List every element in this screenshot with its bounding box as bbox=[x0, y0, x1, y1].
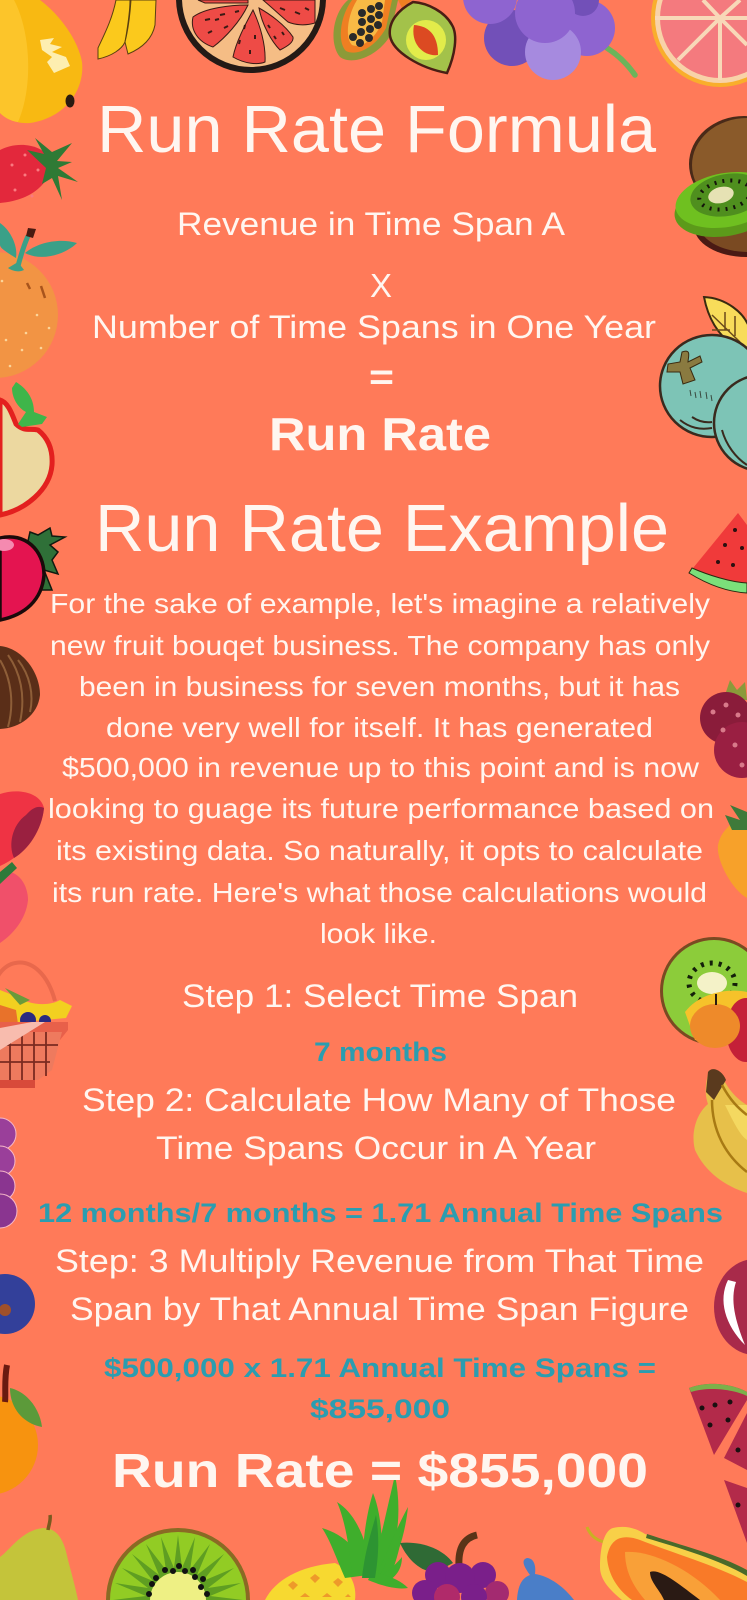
step 1 value: 7 months bbox=[314, 1037, 447, 1067]
final result: Run Rate = $855,000 bbox=[112, 1445, 648, 1498]
formula operator: equals: = bbox=[369, 356, 394, 397]
icon: blueberry bbox=[0, 1274, 35, 1334]
icon: grapefruit slice bbox=[651, 0, 747, 87]
step 3 value: $500,000 x 1.71 Annual Time Spans = bbox=[104, 1353, 656, 1383]
example paragraph: been in business for seven months, but it has bbox=[79, 671, 680, 702]
icon: pear bbox=[0, 1515, 78, 1600]
step 2 value: 12 months/7 months = 1.71 Annual Time Spans bbox=[38, 1198, 723, 1228]
example paragraph: looking to guage its future performance based on bbox=[48, 793, 714, 824]
step 2 heading: Step 2: Calculate How Many of Those bbox=[82, 1082, 676, 1118]
heading: run rate example: Run Rate Example bbox=[95, 491, 669, 566]
icon: strawberry bbox=[0, 138, 78, 203]
example paragraph: done very well for itself. It has generated bbox=[106, 712, 653, 743]
icon: purple grape bunch bbox=[400, 1535, 509, 1600]
icon: mango bbox=[0, 0, 82, 123]
icon: kiwi half bbox=[106, 1528, 250, 1600]
formula term: revenue: Revenue in Time Span A bbox=[177, 206, 566, 242]
step 1 heading: Step 1: Select Time Span bbox=[182, 978, 578, 1014]
icon: red strawberry bbox=[0, 528, 65, 620]
step 3 value: $855,000 bbox=[310, 1394, 450, 1424]
icon: apple half bbox=[0, 382, 52, 515]
icon: avocado half bbox=[390, 2, 455, 73]
step 3 heading: Step: 3 Multiply Revenue from That Time bbox=[55, 1243, 704, 1279]
icon: kiwi with apple bbox=[660, 937, 747, 1062]
example paragraph: look like. bbox=[320, 918, 437, 949]
example paragraph: its run rate. Here's what those calculations would bbox=[52, 877, 707, 908]
step 2 heading: Time Spans Occur in A Year bbox=[156, 1130, 596, 1166]
icon: banana bbox=[98, 0, 156, 59]
title: run rate formula: Run Rate Formula bbox=[97, 92, 657, 167]
example paragraph: For the sake of example, let's imagine a relatively bbox=[50, 588, 710, 619]
icon: plum bbox=[714, 1259, 747, 1355]
icon: raspberries bbox=[700, 680, 747, 778]
section: calculation steps bbox=[38, 978, 723, 1498]
icon: bananas bbox=[694, 1069, 747, 1193]
formula result: run rate: Run Rate bbox=[269, 408, 491, 460]
icon: papaya half bbox=[333, 0, 412, 60]
step 3 value bbox=[104, 1353, 656, 1424]
icon: watermelon slices bbox=[689, 1384, 747, 1543]
icon: watermelon wedge bbox=[689, 513, 747, 593]
icon: coconut half bbox=[0, 646, 40, 729]
icon: papaya bottom right bbox=[587, 1527, 747, 1600]
example paragraph bbox=[48, 588, 714, 949]
icon: purple grapes bbox=[463, 0, 635, 80]
icon: blue fruit bbox=[517, 1558, 574, 1600]
icon: kiwi whole and slice bbox=[670, 116, 747, 257]
icon: pineapple bbox=[265, 1475, 408, 1600]
icon: teal fruit with leaf bbox=[660, 297, 747, 471]
formula operator: multiply: X bbox=[370, 267, 392, 304]
example paragraph: its existing data. So naturally, it opts to calculate bbox=[56, 835, 703, 866]
icon: fruit basket bbox=[0, 963, 72, 1088]
icon: grapes left edge bbox=[0, 1118, 17, 1228]
icon: strawberries pair bbox=[0, 791, 44, 943]
section: run rate formula bbox=[92, 92, 657, 460]
icon: orange with leaves bbox=[0, 223, 77, 378]
icon: grapefruit half bbox=[179, 0, 323, 70]
formula term: number of time spans: Number of Time Spans in One Year bbox=[92, 309, 656, 345]
icon: orange strawberry bbox=[718, 805, 747, 898]
step 3 heading bbox=[55, 1243, 704, 1327]
example paragraph: new fruit bouqet business. The company has only bbox=[50, 630, 710, 661]
icon: orange bottom left bbox=[0, 1365, 42, 1495]
step 2 heading bbox=[82, 1082, 676, 1166]
section: run rate example bbox=[48, 491, 714, 949]
example paragraph: $500,000 in revenue up to this point and is now bbox=[62, 752, 700, 783]
step 3 heading: Span by That Annual Time Span Figure bbox=[70, 1291, 689, 1327]
